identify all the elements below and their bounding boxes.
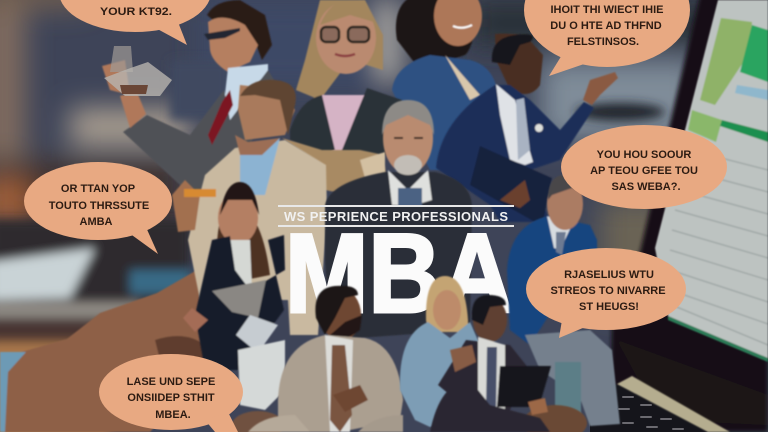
person: blue suit man — [507, 175, 620, 426]
title MBA: MBA — [285, 211, 513, 336]
person: woman with glasses — [290, 0, 402, 155]
speech bubble: right lower: STREOS TO NIVARRE — [550, 285, 666, 297]
icon: glass — [104, 46, 172, 96]
draped fabric — [282, 138, 386, 195]
person: blonde woman with denim jacket — [400, 276, 480, 427]
title rule bottom — [278, 225, 514, 227]
speech bubble: top right — [524, 0, 690, 76]
person: woman with curly hair — [392, 0, 496, 170]
title subheading: WS PEPRIENCE PROFESSIONALS — [284, 209, 508, 224]
person: man with cream jacket — [172, 80, 327, 335]
person: man with dark suit and laptop — [430, 295, 551, 432]
person: young woman with papers — [183, 182, 285, 410]
speech bubble: right upper: SAS WEBA?. — [611, 181, 681, 193]
speech bubble: right lower: ST HEUGS! — [579, 301, 639, 313]
speech bubble: left middle: TOUTO THRSSUTE — [49, 200, 149, 212]
speech bubble: top left — [59, 0, 211, 45]
speech bubble: top right: FELSTINSOS. — [567, 36, 639, 48]
speech bubble: top right: IHOIT THI WIECT IHIE — [550, 4, 664, 16]
speech bubble: right upper: AP TEOU GFEE TOU — [590, 165, 698, 177]
person: center man with grey hair — [325, 100, 472, 340]
speech bubble: left middle: AMBA — [80, 216, 113, 228]
speech bubble: bottom: ONSIIDEP STHIT — [127, 392, 215, 404]
title rule top — [278, 205, 514, 207]
speech bubble: top right: DU O HTE AD THFND — [550, 20, 662, 32]
person: man with navy suit gesturing — [436, 34, 618, 226]
person: man with beige suit and striped tie — [248, 286, 403, 432]
speech bubble: top left: YOUR KT92. — [100, 6, 172, 18]
speech bubble: left middle: OR TTAN YOP — [61, 183, 135, 195]
person: man with red tie holding glass — [102, 0, 274, 189]
speech bubble: bottom — [99, 354, 243, 432]
title text block — [278, 205, 514, 314]
keyboard — [590, 376, 730, 432]
speech bubble: right upper — [561, 125, 727, 209]
large hand foreground — [0, 270, 207, 432]
speech bubble: bottom: MBEA. — [155, 409, 191, 421]
spreadsheet screen — [655, 0, 768, 362]
speech bubble: left middle — [24, 162, 172, 254]
speech bubble: right lower: RJASELIUS WTU — [564, 269, 654, 281]
speech bubble: bottom: LASE UND SEPE — [127, 376, 215, 388]
speech bubble: right upper: YOU HOU SOOUR — [597, 149, 691, 161]
wicker seat — [232, 405, 587, 432]
speech bubble: right lower — [526, 248, 686, 338]
